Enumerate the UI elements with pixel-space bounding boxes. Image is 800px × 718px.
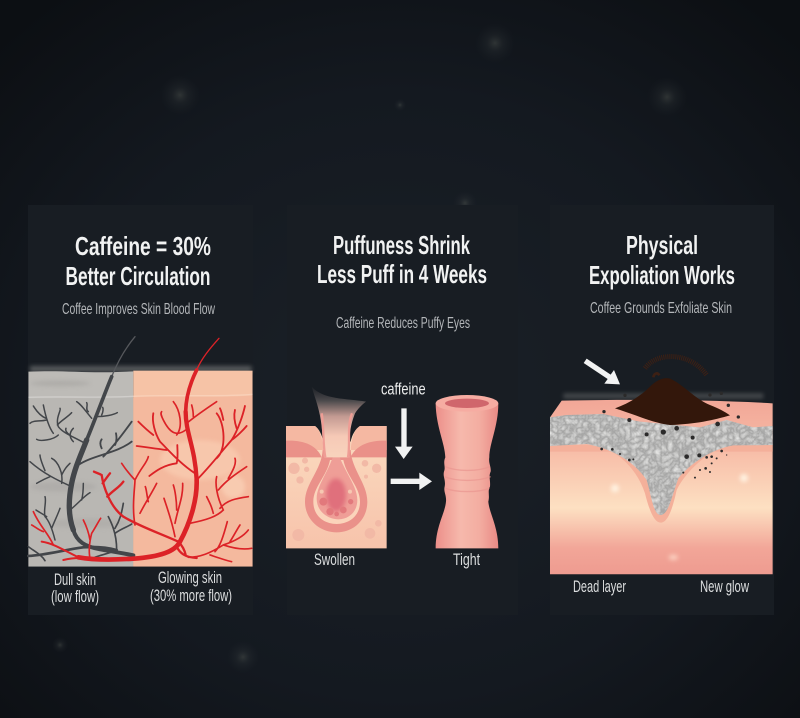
diagram (550, 357, 773, 574)
title: Less Puff in 4 Weeks (317, 259, 487, 289)
illustration: skin (550, 400, 773, 574)
label: swollen: Swollen (314, 550, 355, 569)
label: glowing skin: Glowing skin (158, 568, 222, 587)
icon: grey vessels (28, 337, 135, 561)
panel: exfoliation (550, 205, 774, 615)
label: dull skin (51, 570, 99, 606)
illustration: swollen follicle (286, 387, 387, 548)
subtitle: Coffee Improves Skin Blood Flow (62, 301, 215, 318)
icon: red vessels (32, 338, 252, 562)
illustration: tight tube (436, 395, 498, 548)
label: dead layer: Dead layer (573, 577, 626, 596)
title: Caffeine = 30% (75, 231, 211, 261)
panel: circulation (28, 205, 253, 615)
label: glowing skin (150, 568, 232, 605)
title (589, 230, 735, 290)
illustration: coffee mound (600, 357, 740, 479)
label: dull skin: Dull skin (54, 570, 96, 589)
title (317, 230, 487, 289)
diagram (286, 379, 498, 548)
illustration: dead layer (550, 414, 773, 515)
title: Puffuness Shrink (333, 230, 470, 260)
illustration: pink trough (550, 445, 773, 523)
label: dull skin: (low flow) (51, 587, 99, 606)
label: glowing skin: (30% more flow) (150, 586, 232, 605)
illustration: hair plume (312, 387, 366, 457)
subtitle: Caffeine Reduces Puffy Eyes (336, 315, 470, 332)
label: new glow: New glow (700, 577, 749, 596)
subtitle: Coffee Grounds Exfoliate Skin (590, 300, 732, 317)
arrow: down (395, 408, 413, 459)
title (66, 231, 211, 291)
label: tight: Tight (453, 550, 480, 569)
skin diagram (28, 337, 253, 567)
arrow: to mound (584, 359, 620, 384)
title: Better Circulation (66, 261, 210, 291)
arrow: right (391, 473, 432, 490)
title: Physical (626, 230, 698, 260)
panel: puffiness (286, 205, 518, 615)
label: caffeine: caffeine (381, 379, 426, 398)
